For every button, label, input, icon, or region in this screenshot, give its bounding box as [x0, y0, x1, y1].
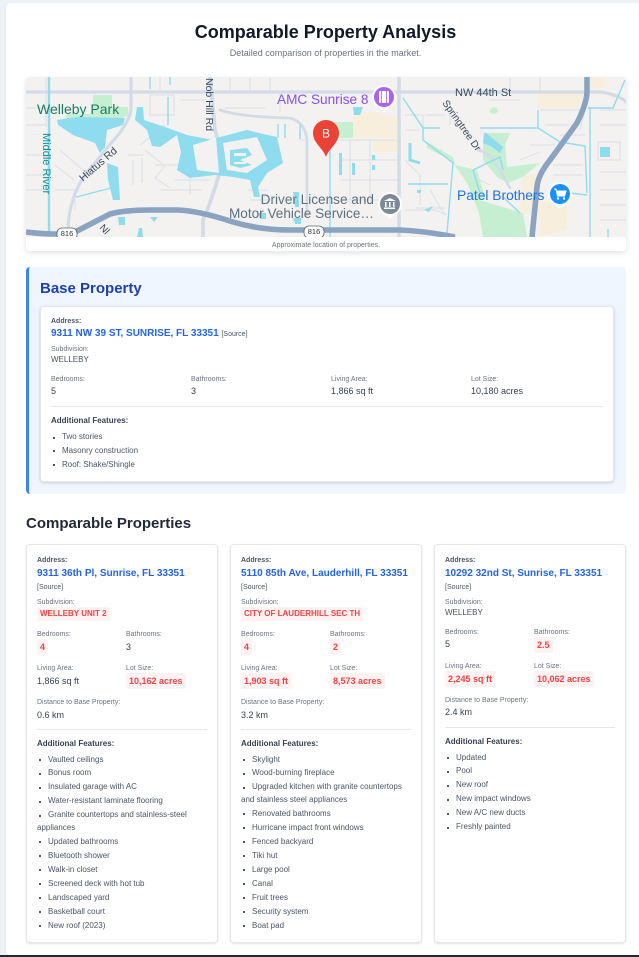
lot size badge: [534, 671, 594, 687]
label: NW 44th St: NW 44th St: [455, 87, 511, 99]
living area badge: 1,903 sq ft: [244, 676, 288, 686]
features list: New impact windows: [456, 794, 531, 803]
features heading: Additional Features:: [37, 738, 114, 748]
source: [Source]: [241, 584, 267, 590]
icon: cinema marker: [372, 85, 396, 112]
features list: Tiki hut: [252, 851, 278, 860]
distance label: Distance to Base Property:: [37, 698, 120, 706]
living area badge: 2,245 sq ft: [448, 674, 492, 684]
living area badge: [445, 671, 495, 687]
features list: Updated: [456, 752, 486, 762]
map caption: Approximate location of properties.: [272, 242, 380, 249]
living area badge: [241, 673, 291, 689]
bedrooms label: Bedrooms:: [241, 630, 275, 638]
distance value: 0.6 km: [37, 710, 64, 720]
subdivision label: Subdivision:: [445, 598, 483, 606]
lot size: [471, 376, 523, 396]
subdivision value: WELLEBY: [445, 608, 483, 617]
features list: Basketball court: [48, 907, 105, 916]
label: Nob Hill Rd: Nob Hill Rd: [203, 78, 215, 131]
subdivision badge: WELLEBY UNIT 2: [40, 609, 107, 618]
icon: location pin B: B: [322, 126, 330, 140]
features list: Walk-in closet: [48, 865, 98, 874]
subdivision badge: CITY OF LAUDERHILL SEC TH: [244, 609, 360, 618]
lot size badge: 10,162 acres: [129, 676, 183, 686]
living area label: Living Area:: [241, 664, 278, 672]
address value: 9311 NW 39 ST, SUNRISE, FL 33351 [Source]: [51, 328, 248, 339]
heading: base property: Base Property: [40, 280, 142, 296]
card: base property details: [40, 306, 614, 482]
bedrooms: Bedrooms:: [51, 376, 85, 382]
address label: Address:: [241, 557, 271, 564]
subdivision value: WELLEBY: [51, 355, 89, 364]
features list: New roof (2023): [48, 921, 105, 930]
label: Patel Brothers: Patel Brothers: [457, 188, 545, 203]
lot size badge: [126, 673, 186, 689]
distance value: 2.4 km: [445, 707, 472, 717]
features list: [53, 432, 138, 469]
label: Motor Vehicle Service: Motor Vehicle Service…: [229, 206, 374, 221]
heading: comparable properties: Comparable Properties: [26, 514, 191, 532]
subtitle: Detailed comparison of properties in the market.: [230, 48, 421, 58]
features list: Bonus room: [48, 768, 91, 777]
distance label: Distance to Base Property:: [445, 696, 528, 704]
bedrooms value: 5: [445, 639, 450, 649]
living area: [331, 376, 373, 396]
features list: Roof: Shake/Shingle: [62, 460, 135, 469]
subdivision badge: [241, 607, 363, 621]
bedrooms: 5: [51, 386, 56, 396]
bathrooms badge: 2.5: [537, 640, 550, 650]
bathrooms label: Bathrooms:: [534, 628, 570, 636]
lot size: 10,180 acres: [471, 386, 523, 396]
label: Driver License: Driver License and: [261, 192, 374, 207]
label: AMC Sunrise 8: AMC Sunrise 8: [277, 92, 368, 107]
distance label: Distance to Base Property:: [241, 698, 324, 706]
bedrooms: [51, 376, 85, 396]
features list: Renovated bathrooms: [252, 809, 331, 818]
living area label: Living Area:: [37, 664, 74, 672]
features list: Bluetooth shower: [48, 851, 110, 860]
features list: Vaulted ceilings: [48, 754, 103, 764]
route shield 816 west: [57, 228, 77, 240]
features list: Masonry construction: [62, 446, 138, 455]
bedrooms label: Bedrooms:: [445, 628, 479, 636]
features list: Screened deck with hot tub: [48, 879, 145, 888]
features heading: Additional Features:: [241, 738, 318, 748]
bedrooms badge: 4: [244, 642, 249, 652]
bathrooms badge: [330, 639, 341, 655]
bedrooms badge: [37, 639, 48, 655]
subdivision: Subdivision:: [51, 346, 89, 352]
features list: Upgraded kitchen with granite countertops and stainless steel appliances: [241, 782, 402, 804]
source: [Source]: [37, 584, 63, 590]
features list: Skylight: [252, 754, 280, 764]
features list: New roof: [456, 780, 488, 789]
card: comparable 1: [26, 544, 218, 943]
label: Welleby Park: Welleby Park: [37, 101, 120, 117]
features list: [447, 752, 531, 831]
lot size badge: 10,062 acres: [537, 674, 591, 684]
bedrooms badge: 4: [40, 642, 45, 652]
map: [26, 77, 626, 237]
distance value: 3.2 km: [241, 710, 268, 720]
icon: government marker: [378, 192, 402, 219]
address label: Address:: [51, 318, 81, 325]
bathrooms: Bathrooms:: [191, 376, 227, 382]
bathrooms: 3: [191, 386, 196, 396]
features list: Freshly painted: [456, 822, 511, 831]
subdivision badge: [37, 607, 110, 621]
features heading: Additional Features:: [445, 736, 522, 746]
bedrooms label: Bedrooms:: [37, 630, 71, 638]
subdivision label: Subdivision:: [37, 598, 75, 606]
lot size badge: [330, 673, 385, 689]
features heading: Additional Features:: [51, 416, 128, 424]
living area value: 1,866 sq ft: [37, 676, 79, 686]
label: Springtree Dr: Springtree Dr: [440, 98, 483, 154]
features list: Large pool: [252, 865, 290, 874]
card: comparable 3: [434, 544, 626, 943]
features list: Landscaped yard: [48, 893, 109, 902]
panel: map card: [26, 77, 626, 251]
label: Middle River: Middle River: [40, 133, 52, 194]
bathrooms value: 3: [126, 642, 131, 652]
lot size label: Lot Size:: [126, 664, 153, 672]
subdivision label: Subdivision:: [241, 598, 279, 606]
label: Hiatus Rd: Hiatus Rd: [77, 145, 120, 184]
features list: Water-resistant laminate flooring: [48, 796, 163, 805]
address value: 9311 36th Pl, Sunrise, FL 33351: [37, 568, 185, 578]
route shield 816 east: [304, 226, 324, 238]
features list: [241, 754, 402, 930]
features list: Updated bathrooms: [48, 837, 118, 846]
address value: 10292 32nd St, Sunrise, FL 33351: [445, 568, 602, 578]
features list: Hurricane impact front windows: [252, 823, 364, 832]
bathrooms badge: [534, 637, 553, 653]
features list: [37, 754, 187, 930]
panel: base property: [26, 267, 626, 494]
features list: Pool: [456, 766, 472, 775]
living area: 1,866 sq ft: [331, 386, 373, 396]
title: Comparable Property Analysis: [195, 22, 456, 42]
features list: Fenced backyard: [252, 837, 313, 846]
features list: Security system: [252, 907, 308, 916]
living area label: Living Area:: [445, 662, 482, 670]
lot size: Lot Size:: [471, 376, 498, 382]
features list: Fruit trees: [252, 893, 288, 902]
features list: Boat pad: [252, 921, 284, 930]
bathrooms: [191, 376, 227, 396]
bathrooms label: Bathrooms:: [126, 630, 162, 638]
address value: 5110 85th Ave, Lauderhill, FL 33351: [241, 568, 408, 578]
icon: location pin B: [313, 120, 339, 157]
address label: Address:: [37, 557, 67, 564]
source: [Source]: [445, 584, 471, 590]
features list: Granite countertops and stainless-steel appliances: [37, 810, 187, 832]
lot size label: Lot Size:: [330, 664, 357, 672]
features list: New A/C new ducts: [456, 808, 525, 817]
features list: Canal: [252, 879, 273, 888]
bedrooms badge: [241, 639, 252, 655]
lot size badge: 8,573 acres: [333, 676, 382, 686]
features list: Wood-burning fireplace: [252, 768, 335, 777]
living area: Living Area:: [331, 376, 368, 382]
bathrooms label: Bathrooms:: [330, 630, 366, 638]
label: partial road: Nl: [97, 223, 111, 237]
card: comparable 2: [230, 544, 422, 943]
route shield 816 east: 816: [308, 227, 320, 236]
address label: Address:: [445, 557, 475, 564]
icon: shopping marker: [548, 182, 572, 209]
features list: Two stories: [62, 432, 102, 441]
lot size label: Lot Size:: [534, 662, 561, 670]
bathrooms badge: 2: [333, 642, 338, 652]
features list: Insulated garage with AC: [48, 782, 137, 791]
